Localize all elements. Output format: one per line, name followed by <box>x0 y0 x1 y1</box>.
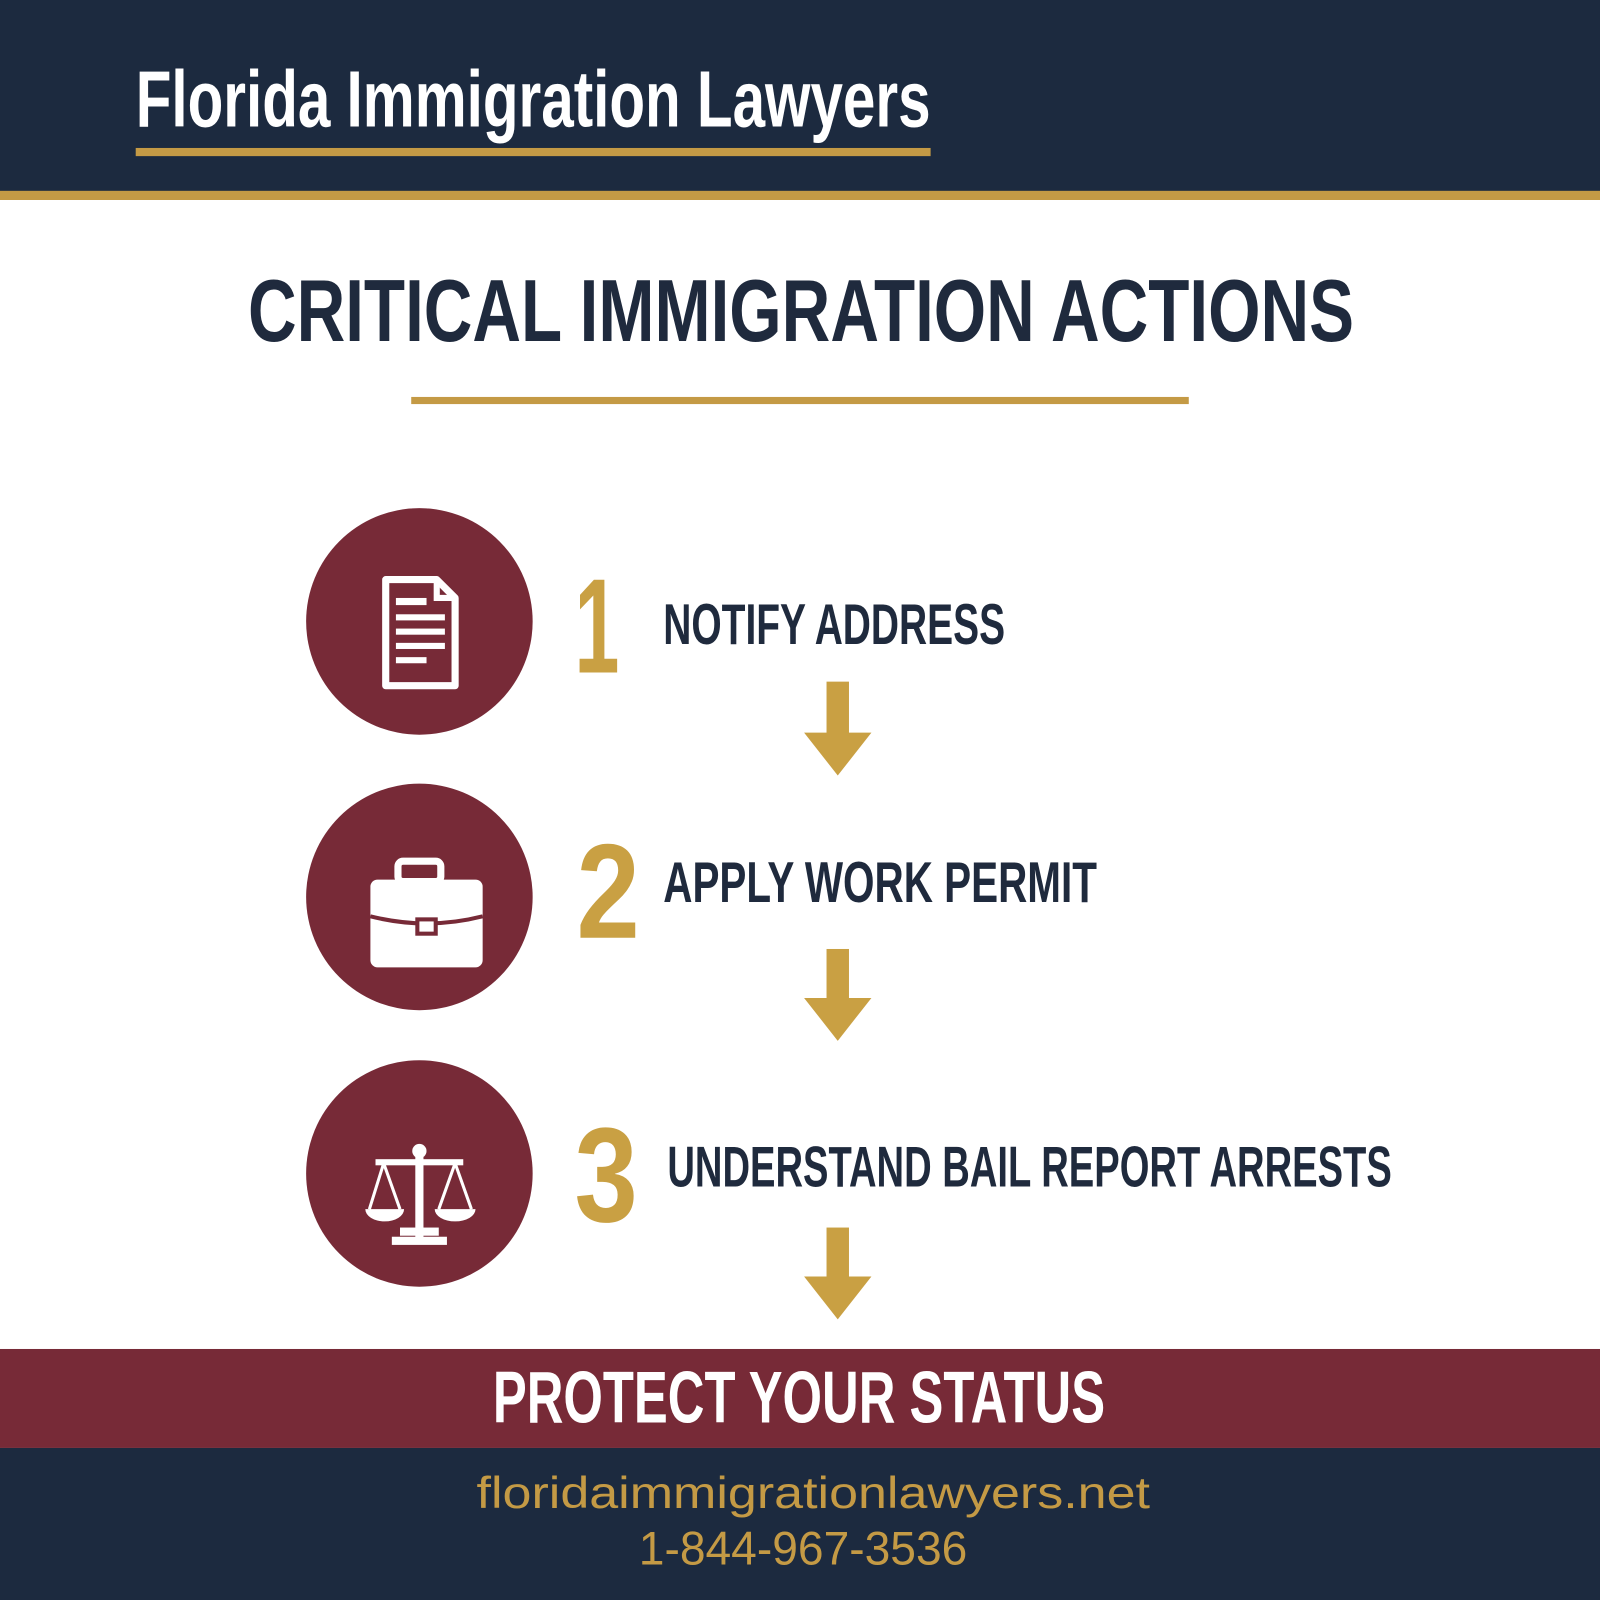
icon: document <box>306 508 533 735</box>
header bar <box>0 0 1600 200</box>
step 1 <box>306 508 1005 735</box>
step 1: NOTIFY ADDRESS <box>663 593 1005 657</box>
banner: protect your status <box>0 1349 1600 1448</box>
step 2: APPLY WORK PERMIT <box>663 851 1097 915</box>
step 2 <box>306 784 1097 1010</box>
arrow 2 <box>804 949 871 1041</box>
main heading <box>248 262 1354 404</box>
footer contact: floridaimmigrationlawyers.net <box>477 1467 1151 1518</box>
arrow 3 <box>804 1228 871 1319</box>
icon: briefcase <box>306 784 533 1010</box>
step 2: 2 <box>577 816 640 967</box>
step 3: 3 <box>574 1099 638 1250</box>
footer contact: 1-844-967-3536 <box>639 1522 967 1574</box>
arrow 1 <box>804 682 871 776</box>
header title: Florida Immigration Lawyers <box>136 55 931 144</box>
step 3 <box>306 1060 1392 1287</box>
icon: scales of justice <box>306 1060 533 1287</box>
step 1: 1 <box>574 550 619 701</box>
banner: protect your status: PROTECT YOUR STATUS <box>493 1355 1105 1438</box>
header title <box>136 55 931 156</box>
footer contact <box>0 1448 1600 1600</box>
